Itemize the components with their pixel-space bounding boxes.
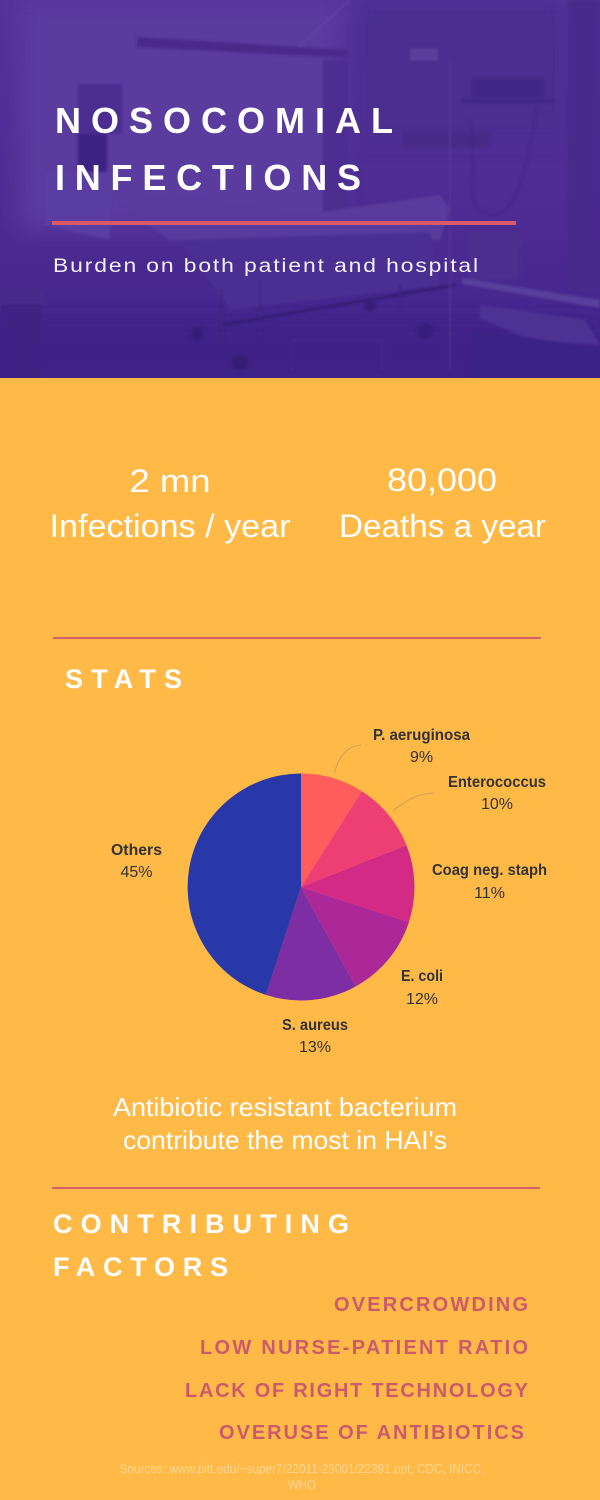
pie label: P. aeruginosa: 9% [410, 749, 433, 766]
bed [159, 196, 450, 240]
pie label: E. coli [401, 968, 443, 1008]
leader line: P. aeruginosa [334, 745, 361, 773]
pie label: P. aeruginosa: P. aeruginosa [373, 727, 470, 744]
chart caption: contribute the most in HAI's [123, 1125, 447, 1155]
factor: overcrowding: OVERCROWDING [334, 1294, 528, 1316]
contributing factors heading: CONTRIBUTING [53, 1209, 349, 1239]
pie label: S. aureus: 13% [299, 1039, 331, 1056]
stats divider [53, 637, 541, 639]
hero panel: hospital ward photo [0, 0, 600, 390]
pie label: Enterococcus: Enterococcus [448, 774, 546, 791]
slice: S. aureus [266, 887, 356, 1000]
leader line: Enterococcus [393, 793, 434, 811]
sources: WHO [288, 1478, 316, 1492]
sources: Sources: www.pitt.edu/~super7/22011-23001/22391.ppt, CDC, INICC, [120, 1462, 484, 1476]
pie label: Others: Others [111, 842, 162, 859]
stat: deaths per year: Deaths a year [339, 508, 546, 544]
stat: deaths per year [339, 462, 546, 544]
stats heading: STATS [65, 664, 182, 694]
factor: technology: LACK OF RIGHT TECHNOLOGY [185, 1380, 529, 1402]
contributing factors heading [53, 1209, 349, 1282]
chart caption [113, 1092, 457, 1155]
subtitle: Burden on both patient and hospital [53, 255, 480, 277]
stat: infections per year: Infections / year [50, 508, 291, 544]
factors list [185, 1294, 529, 1444]
pie label: Coag neg. staph: Coag neg. staph [432, 862, 547, 879]
pie label: Coag neg. staph: 11% [474, 885, 505, 902]
slice: Coag neg. staph [301, 845, 414, 922]
chart caption: Antibiotic resistant bacterium [113, 1092, 457, 1122]
pie label: E. coli: 12% [406, 991, 438, 1008]
slice: Enterococcus [301, 791, 406, 887]
pie label: S. aureus: S. aureus [282, 1017, 348, 1034]
pie label: E. coli: E. coli [401, 968, 443, 985]
stat: deaths per year: 80,000 [387, 462, 497, 498]
slice: E. coli [301, 887, 409, 986]
sources [120, 1462, 484, 1492]
pie label: Enterococcus [448, 774, 546, 813]
pie label: Enterococcus: 10% [481, 796, 513, 813]
stat: infections per year [50, 463, 291, 544]
factor: nurse-patient ratio: LOW NURSE-PATIENT RATIO [200, 1337, 528, 1359]
pie chart [188, 774, 414, 1000]
pie label: Others: 45% [120, 864, 153, 881]
cabinet and trolley [470, 278, 471, 279]
slice: P. aeruginosa [301, 774, 362, 887]
pie label: Others [111, 842, 162, 881]
pie label: S. aureus [282, 1017, 348, 1056]
title: NOSOCOMIAL [55, 100, 393, 141]
factors divider [52, 1187, 540, 1189]
pie label: P. aeruginosa [373, 727, 470, 766]
pie label: Coag neg. staph [432, 862, 547, 902]
stat: infections per year: 2 mn [130, 463, 210, 499]
factor: antibiotics: OVERUSE OF ANTIBIOTICS [219, 1422, 524, 1444]
title: INFECTIONS [55, 157, 361, 198]
title divider [52, 221, 516, 225]
slice: Others [188, 774, 301, 995]
title [55, 100, 393, 198]
contributing factors heading: FACTORS [53, 1252, 228, 1282]
